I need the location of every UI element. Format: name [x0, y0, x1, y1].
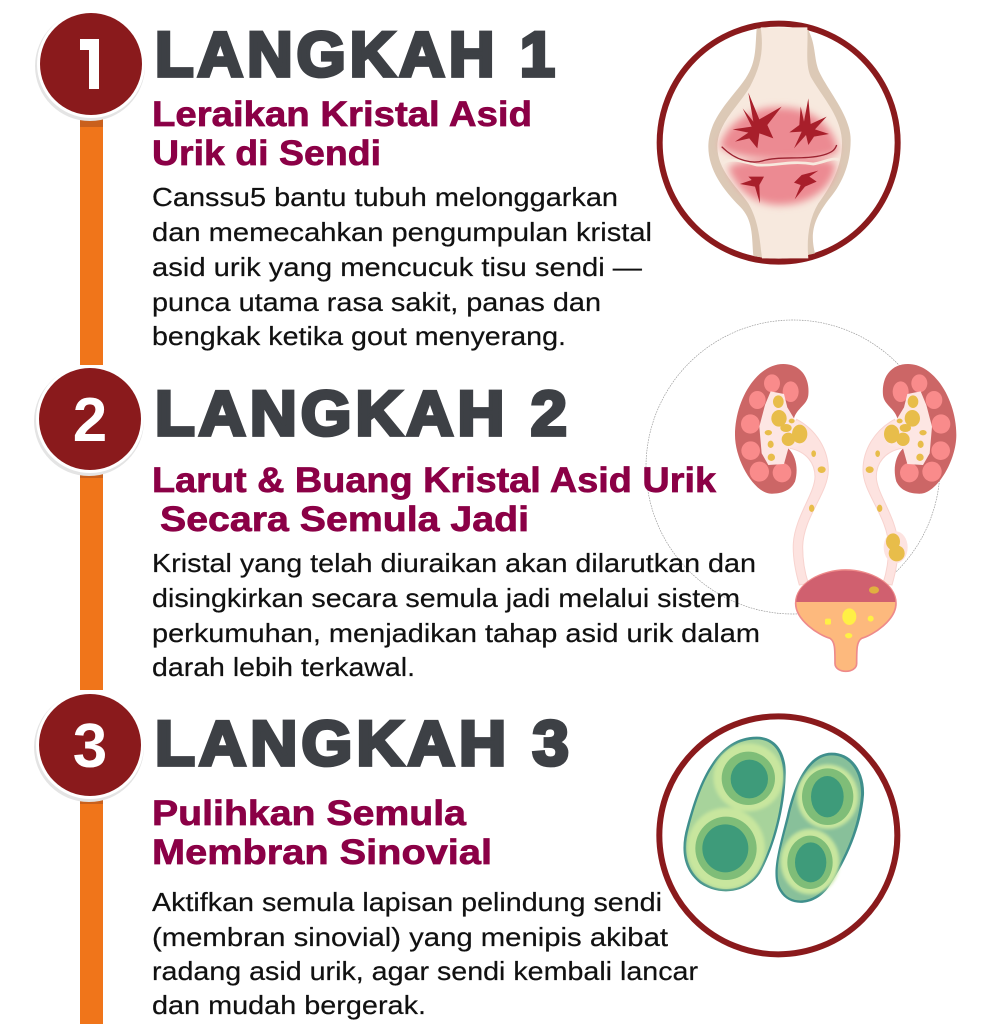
step 1 body text: punca utama rasa sakit, panas dan	[152, 287, 601, 317]
number badge 3: 3	[73, 712, 107, 781]
step 1 body text: asid urik yang mencucuk tisu sendi —	[152, 252, 642, 282]
illustration: inflamed joint	[660, 24, 898, 262]
step 2 body text: darah lebih terkawal.	[152, 652, 415, 682]
illustration: kidneys and bladder	[646, 320, 956, 671]
step 1 body text: bengkak ketika gout menyerang.	[152, 321, 566, 351]
step 2 body text: perkumuhan, menjadikan tahap asid urik dalam	[152, 618, 760, 648]
step 3 subheading: Membran Sinovial	[152, 833, 492, 872]
step 2 subheading: Secara Semula Jadi	[160, 500, 529, 539]
step 3 subheading: Pulihkan Semula	[152, 794, 467, 833]
step 2 subheading	[152, 461, 717, 539]
timeline bar: step 1	[80, 119, 103, 365]
number badge 1	[35, 10, 145, 121]
step 1 subheading: Urik di Sendi	[152, 134, 381, 173]
step 2 subheading: Larut & Buang Kristal Asid Urik	[152, 461, 717, 500]
step 1 body text: dan memecahkan pengumpulan kristal	[152, 217, 652, 247]
step 3 body text: radang asid urik, agar sendi kembali lancar	[152, 956, 698, 986]
step 1 heading: LANGKAH 1	[155, 20, 559, 90]
step 3 subheading	[152, 794, 492, 872]
step 1 body text: Canssu5 bantu tubuh melonggarkan	[152, 182, 618, 212]
step 3 heading: LANGKAH 3	[155, 709, 573, 779]
timeline bar: step 3	[80, 796, 103, 1024]
step 2 body text: Kristal yang telah diuraikan akan dilarutkan dan	[152, 548, 756, 578]
step 1 body text	[152, 182, 652, 351]
step 3 body text	[152, 887, 698, 1020]
illustration: synovial cells	[659, 716, 897, 954]
number badge 2	[34, 365, 144, 476]
step 3 body text: dan mudah bergerak.	[152, 990, 426, 1020]
step 1 subheading	[152, 95, 532, 173]
timeline bar: step 2	[80, 470, 103, 690]
step 2 heading: LANGKAH 2	[155, 379, 571, 449]
step 2 body text: disingkirkan secara semula jadi melalui sistem	[152, 583, 740, 613]
step 2 body text	[152, 548, 760, 682]
step 3 body text: (membran sinovial) yang menipis akibat	[152, 922, 669, 952]
step 1 subheading: Leraikan Kristal Asid	[152, 95, 532, 134]
step 3 body text: Aktifkan semula lapisan pelindung sendi	[152, 887, 662, 917]
number badge 2: 2	[73, 386, 107, 455]
number badge 3	[34, 691, 144, 802]
